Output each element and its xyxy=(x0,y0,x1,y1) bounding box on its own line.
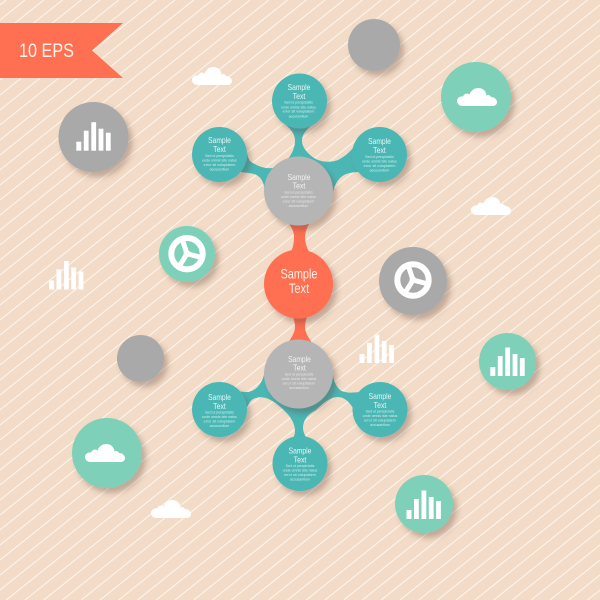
node: central orange xyxy=(264,250,333,318)
node: lower gray hub xyxy=(264,340,333,408)
node: upper left teal: error sit voluptatem xyxy=(204,162,236,167)
node: upper gray hub: error sit voluptatem xyxy=(283,198,315,204)
node: bottom teal xyxy=(272,436,328,491)
node: upper gray hub: Sed ut perspiciatis xyxy=(284,190,313,194)
badge: teal bars right xyxy=(479,333,536,390)
badge: teal cloud top right xyxy=(441,62,511,132)
badge: plain gray small xyxy=(117,335,164,382)
node: top teal: Text xyxy=(293,91,306,101)
node: bottom teal: Text xyxy=(294,454,307,464)
badge: teal cloud bottom left xyxy=(72,418,142,488)
node: top teal: accusantium xyxy=(289,113,309,118)
node: upper gray hub xyxy=(264,156,333,226)
node: central orange: Sample xyxy=(280,266,318,282)
node: lower right teal xyxy=(352,382,408,437)
node: upper gray hub: Text xyxy=(293,180,306,190)
node: lower right teal: Text xyxy=(374,400,387,410)
node: upper right teal: error sit voluptatem xyxy=(364,163,396,168)
icon: white bars centre right xyxy=(360,334,394,363)
node: lower left teal: Sed ut perspiciatis xyxy=(205,410,234,414)
node: lower right teal: Sed ut perspiciatis xyxy=(366,408,394,414)
node: bottom teal: unde omnis iste natus xyxy=(283,468,317,472)
node: upper gray hub: accusantium xyxy=(289,203,309,208)
badge: gray wheel xyxy=(379,247,447,315)
node: lower right teal: error sit voluptatem xyxy=(364,418,396,422)
node: lower gray hub: unde omnis iste natus xyxy=(282,376,316,381)
icon: white cloud top xyxy=(192,67,232,85)
node: upper right teal: accusantium xyxy=(370,168,390,172)
node: lower gray hub: Sed ut perspiciatis xyxy=(285,372,313,376)
node: lower right teal: Sample xyxy=(369,391,392,401)
node: upper left teal: accusantium xyxy=(210,166,230,172)
node: upper right teal xyxy=(352,127,407,182)
node: upper left teal: Sample xyxy=(208,135,231,145)
node: bottom teal: Sed ut perspiciatis xyxy=(286,463,314,468)
node: lower left teal: error sit voluptatem xyxy=(204,418,236,424)
node: lower gray hub: error sit voluptatem xyxy=(283,380,315,386)
node: upper gray hub: Sample xyxy=(288,172,311,182)
node: lower left teal: Sample xyxy=(208,392,231,402)
connectors: lower teal arms xyxy=(238,375,360,447)
badge: gray bars xyxy=(58,102,128,172)
connectors: orange stems xyxy=(288,222,312,343)
node: lower left teal: unde omnis iste natus xyxy=(202,414,237,419)
node: top teal xyxy=(272,74,327,128)
node: lower left teal: accusantium xyxy=(210,423,230,428)
node: top teal: Sample xyxy=(288,82,311,92)
badge: teal wheel xyxy=(159,226,215,282)
badge: teal bars bottom xyxy=(395,475,453,533)
node: upper left teal xyxy=(192,127,247,182)
node: lower left teal: Text xyxy=(213,401,226,411)
icon: white cloud bottom xyxy=(151,500,191,518)
node: central orange: Text xyxy=(289,281,309,296)
node: upper left teal: Text xyxy=(213,144,226,154)
node: upper left teal: unde omnis iste natus xyxy=(202,158,237,162)
node: upper right teal: Text xyxy=(373,145,386,155)
banner: 10 EPS xyxy=(0,23,123,78)
icon: white bars left xyxy=(49,261,83,290)
node: lower right teal: accusantium xyxy=(370,422,390,427)
node: lower right teal: unde omnis iste natus xyxy=(363,413,397,418)
node: top teal: unde omnis iste natus xyxy=(281,104,316,109)
node: upper right teal: Sample xyxy=(368,136,391,146)
node: upper left teal: Sed ut perspiciatis xyxy=(205,153,234,158)
node: bottom teal: Sample xyxy=(289,446,312,456)
connectors: upper teal arms xyxy=(240,120,360,192)
node: lower left teal xyxy=(192,382,247,437)
node: top teal: Sed ut perspiciatis xyxy=(284,100,313,105)
node: upper right teal: Sed ut perspiciatis xyxy=(365,154,394,159)
node: top teal: error sit voluptatem xyxy=(283,109,315,114)
node: bottom teal: error sit voluptatem xyxy=(284,472,316,477)
node: bottom teal: accusantium xyxy=(290,476,310,482)
node: upper gray hub: unde omnis iste natus xyxy=(281,194,316,199)
node: lower gray hub: accusantium xyxy=(289,385,309,390)
node: lower gray hub: Text xyxy=(293,362,306,372)
badge: plain gray top xyxy=(348,19,400,71)
node: lower gray hub: Sample xyxy=(288,354,311,364)
node: upper right teal: unde omnis iste natus xyxy=(362,158,397,164)
banner: 10 EPS: 10 EPS xyxy=(19,41,74,62)
icon: white cloud right xyxy=(471,197,511,215)
